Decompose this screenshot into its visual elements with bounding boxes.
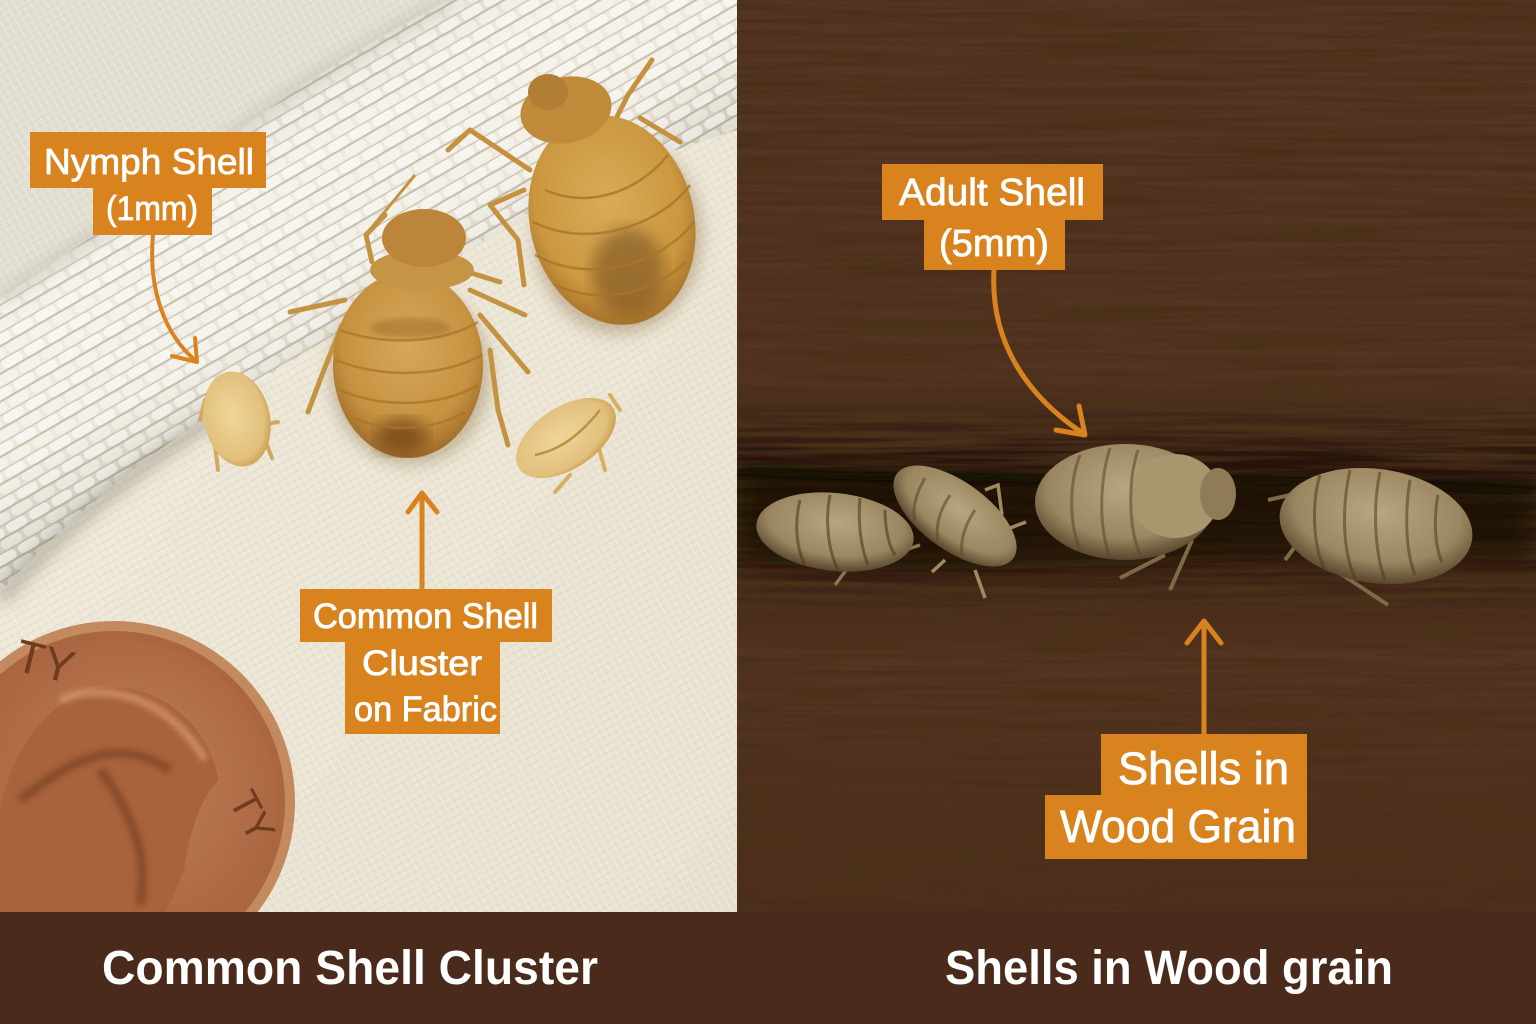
label: nymph shell [30,132,266,235]
coin: TY [220,784,283,849]
caption bar [0,912,1536,1024]
label: adult shell [882,164,1103,270]
label: adult shell: (5mm) [939,223,1049,265]
bug: large adult shell [448,60,717,343]
label: shells in wood grain [1045,734,1307,859]
label: shells in wood grain: Shells in [1118,743,1289,794]
shell: second husk [893,466,1026,598]
wood crack [737,458,1536,570]
caption: right: Shells in Wood grain [945,942,1393,995]
arrow: adult shell [994,270,1085,435]
coin [0,621,295,912]
arrow: common shell cluster [408,493,437,589]
label: nymph shell: (1mm) [106,190,198,228]
panel: fabric photo [0,0,737,983]
label: common shell cluster on fabric: Cluster [362,644,482,683]
shell: far left husk [752,485,920,585]
arrow: shells in wood grain [1187,621,1221,735]
bug: nymph shell [195,365,279,473]
label: shells in wood grain: Wood Grain [1060,801,1296,852]
label: common shell cluster on fabric: Common Shell [313,597,538,636]
label: common shell cluster on fabric: on Fabric [354,690,497,729]
label: adult shell: Adult Shell [899,172,1085,214]
fabric fold [0,0,737,600]
panel: wood photo [737,0,1536,730]
shell: right husk [1268,468,1472,606]
shell: adult husk [1035,444,1236,590]
label: nymph shell: Nymph Shell [44,141,254,182]
label: common shell cluster on fabric [300,589,552,734]
caption: left: Common Shell Cluster [102,942,598,995]
arrow: nymph shell [152,235,197,362]
bug: center shell [290,175,528,465]
coin: TY [10,629,80,694]
bug: small pale shell [516,392,622,494]
